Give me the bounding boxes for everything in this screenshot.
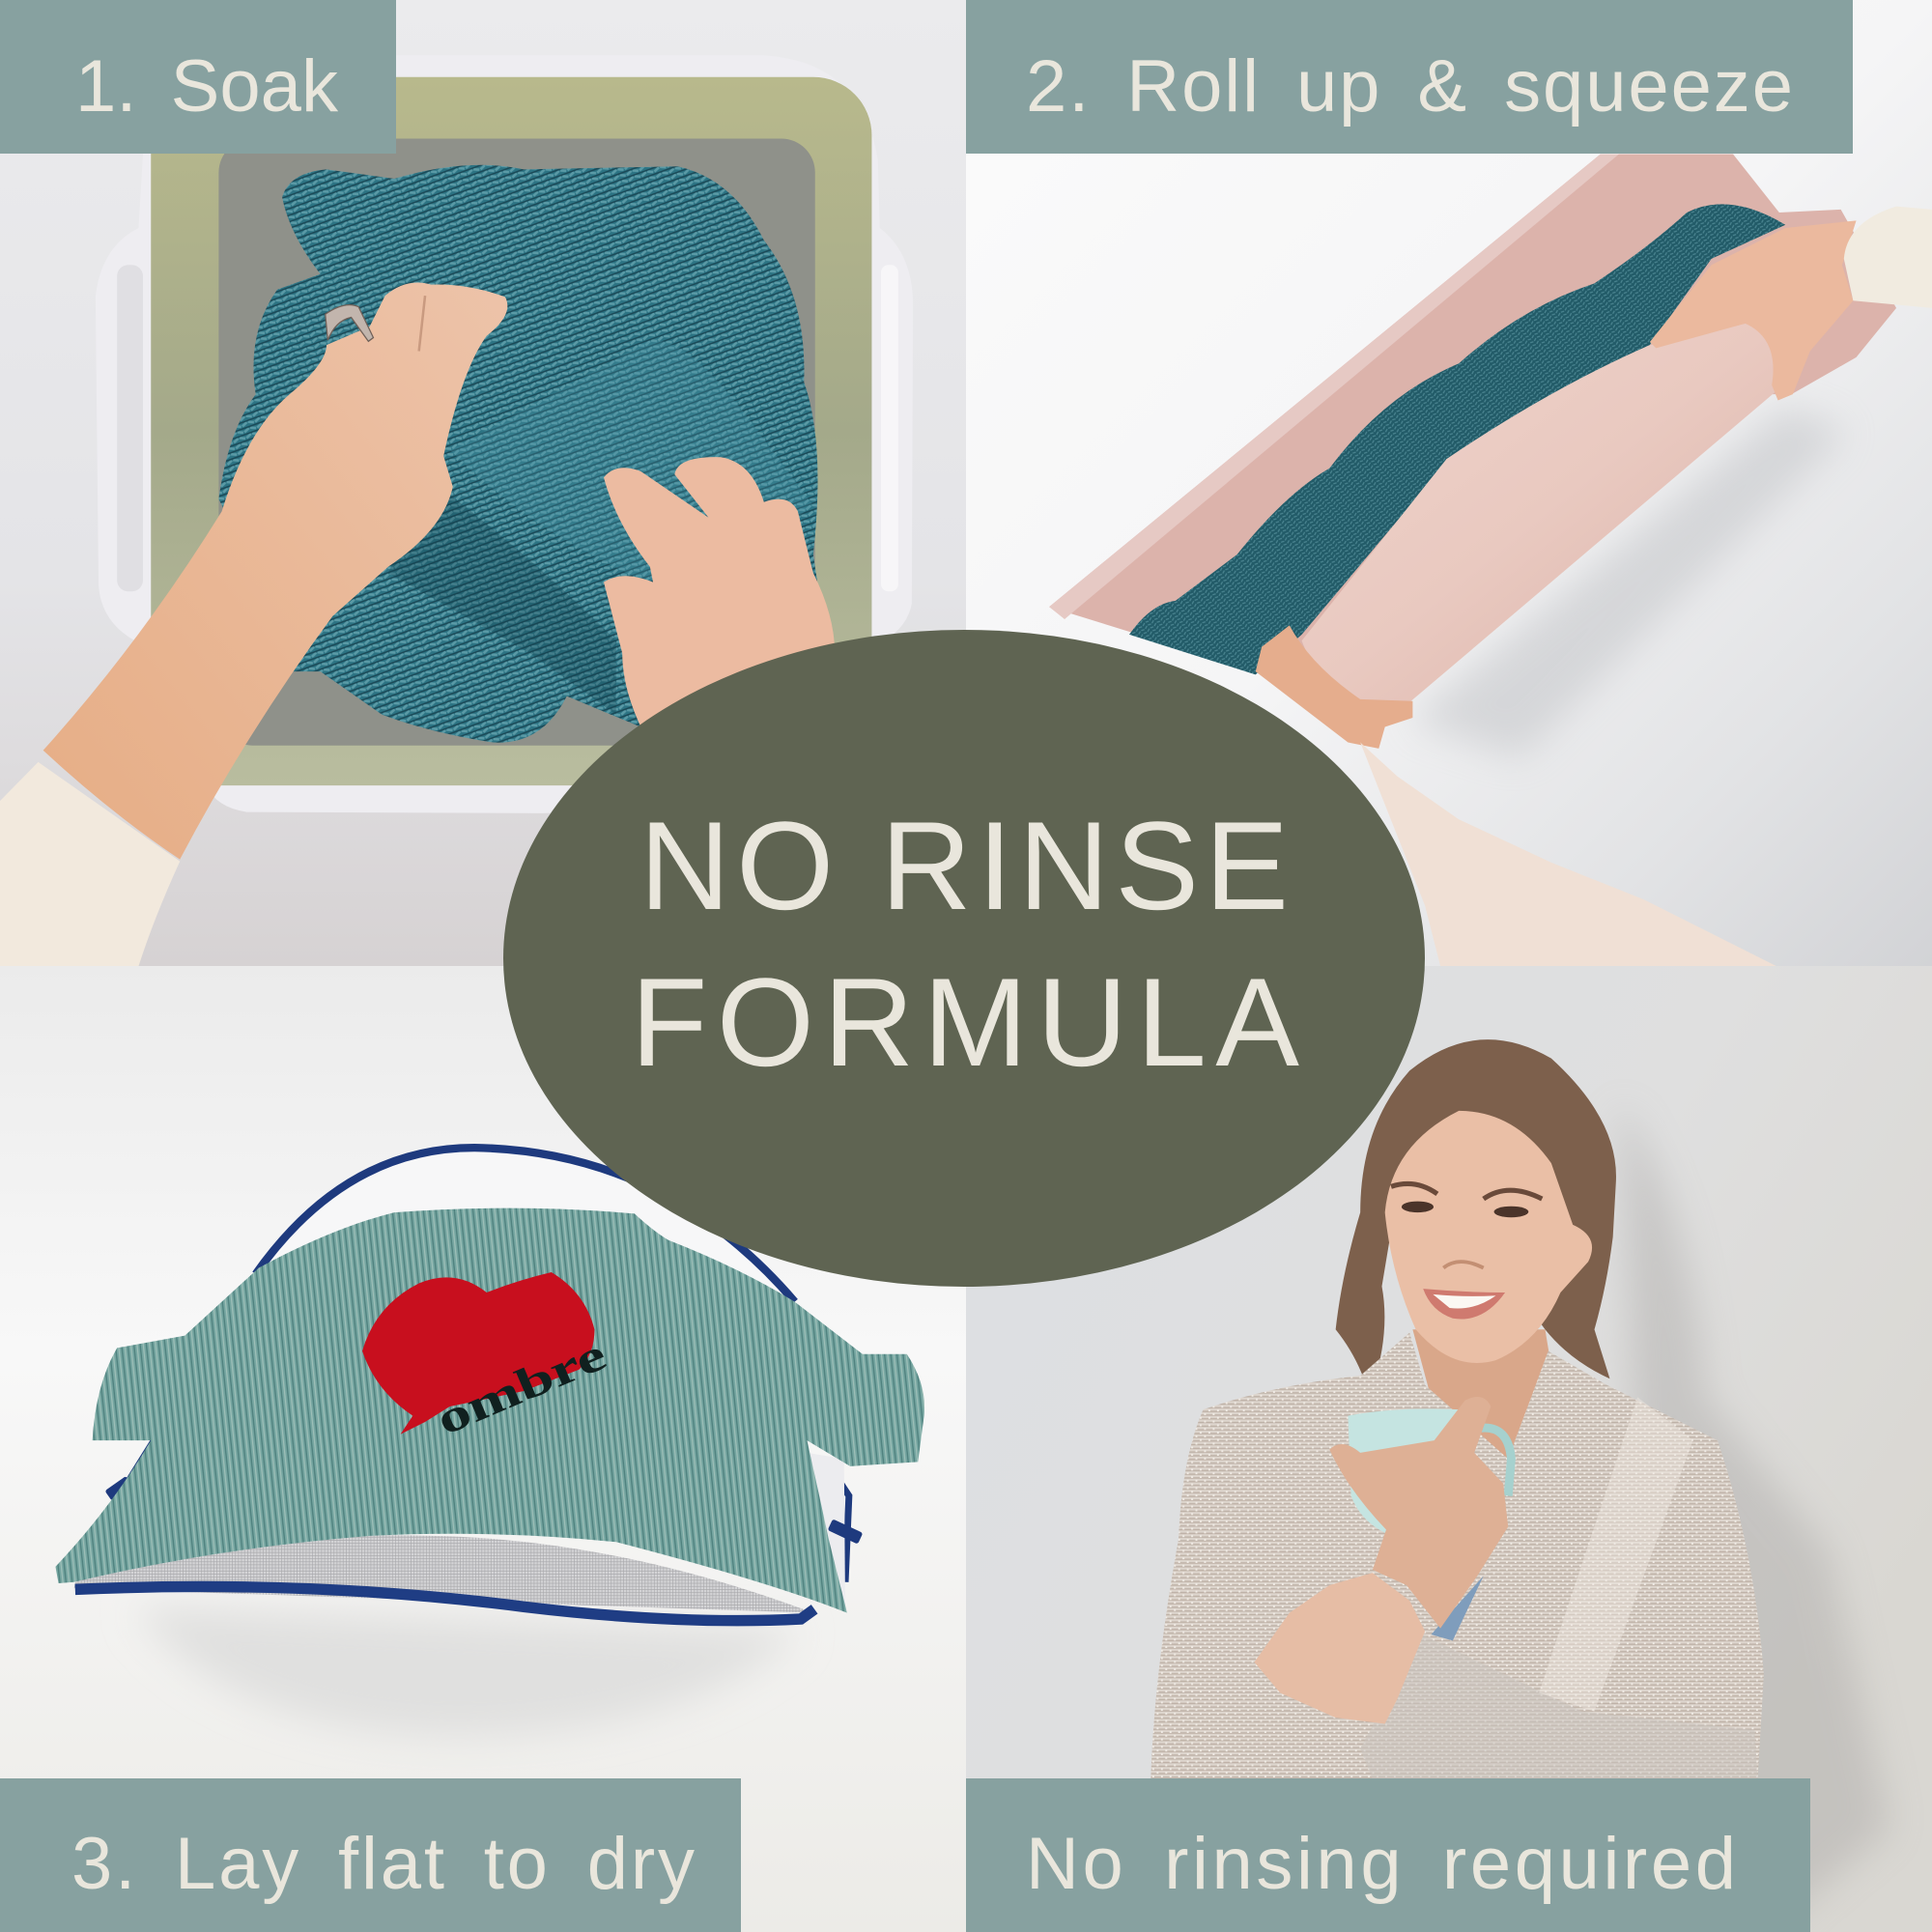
drying rack <box>74 1148 863 1621</box>
face details <box>1391 1183 1542 1320</box>
hair <box>1336 1039 1616 1397</box>
headline line 1: NO RINSE <box>639 795 1289 936</box>
neck <box>1412 1329 1551 1459</box>
label: no rinsing: No rinsing required <box>1026 1823 1736 1905</box>
lower hand <box>1254 1573 1425 1723</box>
panel: lay flat to dry photo <box>0 966 966 1932</box>
heart <box>362 1272 594 1435</box>
green sweater <box>55 1208 924 1613</box>
hand: right hand <box>604 457 835 733</box>
cardigan <box>1151 1332 1764 1779</box>
mug <box>1348 1408 1511 1533</box>
panel: woman with mug photo <box>966 966 1932 1932</box>
label: step 3 <box>0 1778 741 1932</box>
towel roll <box>1302 324 1777 705</box>
floor shadow <box>135 1606 801 1737</box>
label: step 2: 2. Roll up & squeeze <box>1026 45 1793 128</box>
knitted sweater soaking <box>218 165 822 743</box>
hand: left arm and fist <box>43 282 507 860</box>
label: no rinsing <box>966 1778 1810 1932</box>
headline line 2: FORMULA <box>631 952 1299 1093</box>
knit strip <box>1129 204 1785 674</box>
hand on mug <box>1329 1397 1508 1629</box>
label: step 1: 1. Soak <box>75 45 339 128</box>
roll shadow <box>1409 407 1847 757</box>
label: step 1 <box>0 0 396 154</box>
flat towel <box>1049 154 1896 678</box>
wall shadow <box>1619 1101 1890 1932</box>
label: step 2 <box>966 0 1853 154</box>
sleeve <box>0 762 180 966</box>
hand: upper <box>1650 220 1857 401</box>
panel: soak photo <box>0 0 966 966</box>
face <box>1385 1111 1592 1363</box>
knitted word: ombre <box>429 1329 613 1445</box>
hand: lower <box>1256 625 1412 749</box>
sleeve: lower <box>1360 743 1776 966</box>
ring <box>326 305 373 341</box>
panel: roll up and squeeze photo <box>966 0 1932 966</box>
label: step 3: 3. Lay flat to dry <box>71 1823 695 1905</box>
tub <box>96 55 913 813</box>
sleeve: upper <box>1844 207 1932 308</box>
central ellipse with headline <box>503 630 1425 1287</box>
